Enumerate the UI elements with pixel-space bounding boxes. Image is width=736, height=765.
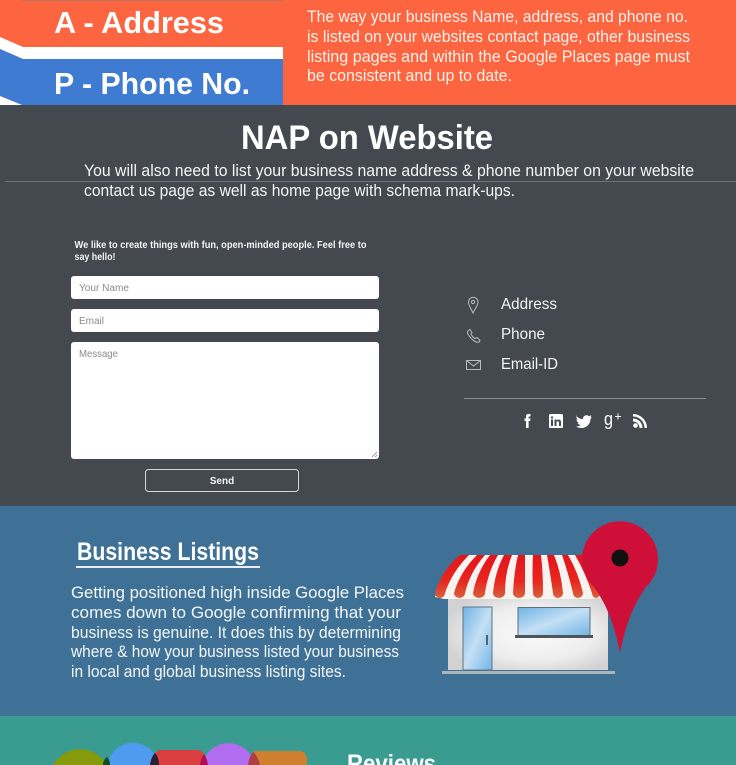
panel: Reviews [0,716,736,765]
shop door [463,607,492,670]
icon: google plus: g [604,409,613,429]
white ribbon corner [0,96,22,105]
shop base [442,671,615,674]
icon: facebook [524,414,530,428]
map pin [582,521,658,653]
input: email [71,309,379,332]
green circle [53,749,107,765]
form intro text: We like to create things with fun, open-minded people. Feel free to [74,240,366,251]
icon: rss [633,414,647,428]
input: message: Message [79,349,118,360]
icon: shop with map pin [435,521,658,674]
input: your name: Your Name [79,283,129,294]
text block: website intro [84,161,694,200]
panel: Business Listings [0,506,736,716]
overlap: purple and orange [248,752,260,765]
social icons [524,409,647,429]
heading: A - Address: A - Address [54,5,224,40]
label: address: Address [501,296,557,313]
contact details [464,296,706,429]
awning [435,555,600,599]
text block: NAP description: listing pages and within the Google Places page must [307,47,690,66]
shop window [515,608,593,638]
text block: business listings: where & how your business listed your business [70,642,399,661]
panel: NAP letters and description [0,0,736,105]
heading: P - Phone No.: P - Phone No. [54,66,250,101]
blue phone ribbon [0,49,283,105]
text block: business listings: business is genuine. It does this by determining [71,623,401,642]
icon: phone [468,330,480,342]
text block: business listings: Getting positioned high inside Google Places [71,583,404,602]
icon: location pin [468,297,478,313]
overlap: green and blue [103,757,110,765]
text block: website intro: You will also need to list your business name address & phone number on your website [84,161,694,180]
text block: business listings: comes down to Google confirming that your [71,603,401,622]
icon: twitter [576,415,592,428]
form intro text [74,240,366,263]
text block: NAP description [307,7,690,85]
icon: envelope [466,360,480,370]
panel: NAP on Website [0,105,736,506]
send button: Send [210,476,234,487]
review shapes [53,743,307,765]
label: phone: Phone [501,326,545,343]
text block: NAP description: be consistent and up to date. [307,66,512,85]
shop wall [448,596,608,670]
text block: NAP description: is listed on your websites contact page, other business [307,27,690,46]
form intro text: say hello! [74,252,116,263]
text block: business listings [70,583,404,681]
label: email: Email-ID [501,356,558,373]
text block: website intro: contact us page as well as home page with schema mark-ups. [84,181,515,200]
text block: business listings: in local and global business listing sites. [71,662,346,681]
white ribbon band [0,37,283,59]
text block: NAP description: The way your business Name, address, and phone no. [307,7,688,26]
orange rounded tile [252,751,307,765]
heading: NAP on Website: NAP on Website [241,119,493,157]
overlap: red and purple [200,754,208,765]
input: email: Email [79,316,104,327]
input: your name [71,276,379,299]
overlap: blue and red [150,753,159,765]
input: message [71,342,379,459]
blue circle [108,743,158,765]
contact form [71,240,379,492]
red rounded tile [150,750,208,765]
heading: Business Listings: Business Listings [77,538,259,566]
icon: linkedin [549,414,563,428]
send button [146,470,298,492]
purple circle [202,743,255,765]
